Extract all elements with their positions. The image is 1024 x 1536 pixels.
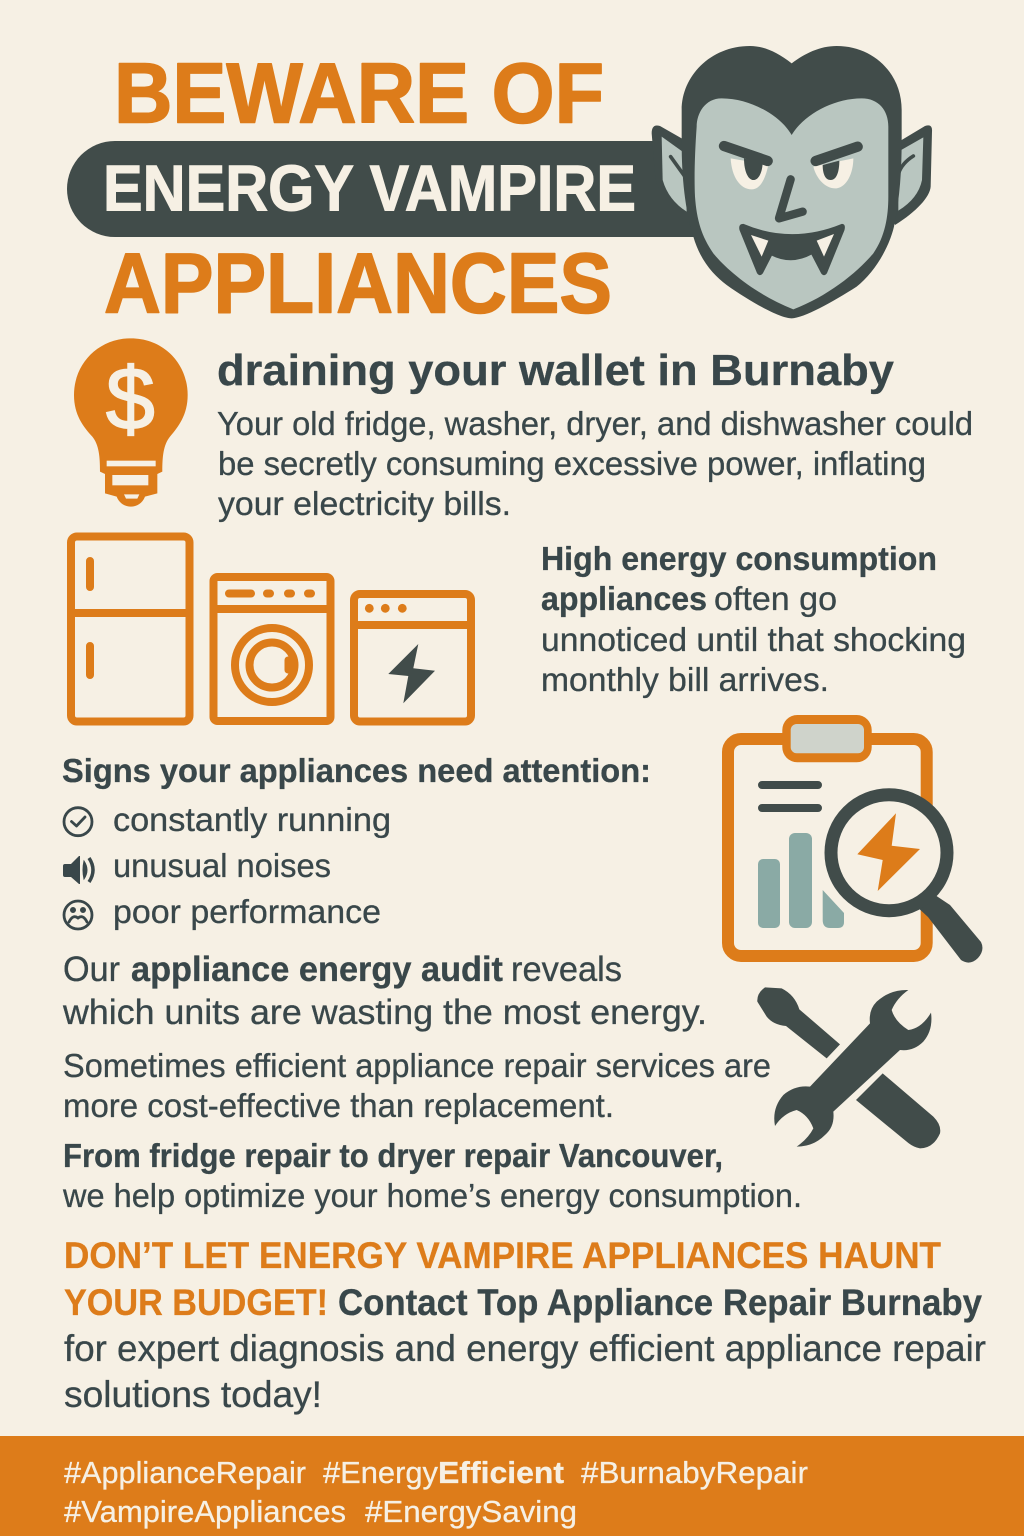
service text	[62, 1137, 802, 1214]
intro paragraph: Your old fridge, washer, dryer, and dishwasher could	[217, 405, 973, 442]
title line: appliances: APPLIANCES	[104, 236, 612, 332]
callout: high energy consumption: appliances	[541, 580, 707, 617]
footer band with hashtags: #BurnabyRepair	[581, 1455, 808, 1490]
call to action: YOUR BUDGET!	[64, 1282, 328, 1323]
repair text: more cost-effective than replacement.	[63, 1087, 614, 1124]
signs list	[63, 801, 391, 930]
callout: high energy consumption: High energy consumption	[541, 540, 937, 577]
subheading: draining your wallet in Burnaby	[217, 346, 895, 395]
icon: vampire face	[652, 46, 932, 318]
repair text: Sometimes efficient appliance repair services are	[63, 1047, 771, 1084]
audit text: Our	[63, 950, 120, 989]
service text: From fridge repair to dryer repair Vancouver,	[63, 1137, 723, 1174]
icon: crossed screwdriver and wrench	[757, 987, 940, 1148]
audit text: reveals	[511, 950, 622, 989]
call to action: for expert diagnosis and energy efficient appliance repair	[64, 1328, 986, 1369]
callout: high energy consumption: unnoticed until that shocking	[541, 621, 966, 658]
footer band with hashtags	[0, 1436, 1024, 1536]
icon: dishwasher with lightning bolt	[354, 594, 471, 722]
footer band with hashtags: #VampireAppliances	[64, 1494, 346, 1529]
icon: unhappy face	[64, 901, 92, 929]
callout: high energy consumption: often go	[714, 580, 837, 617]
dark pill banner	[67, 141, 720, 237]
callout: high energy consumption	[541, 540, 966, 698]
call to action: Contact Top Appliance Repair Burnaby	[338, 1282, 982, 1323]
call to action: solutions today!	[64, 1374, 322, 1415]
audit text: which units are wasting the most energy.	[62, 993, 707, 1032]
icon: washing machine	[214, 577, 330, 721]
footer band with hashtags: #Energy	[323, 1455, 438, 1490]
repair text	[63, 1047, 771, 1124]
footer band with hashtags: #ApplianceRepair	[64, 1455, 306, 1490]
icons: appliances row	[71, 536, 471, 722]
intro paragraph	[217, 405, 973, 522]
icon: clipboard audit with magnifier	[728, 715, 982, 963]
call to action: DON’T LET ENERGY VAMPIRE APPLIANCES HAUNT	[64, 1235, 941, 1276]
footer band with hashtags: #EnergySaving	[365, 1494, 577, 1529]
icon: fridge	[71, 536, 190, 722]
call to action	[64, 1235, 986, 1415]
intro paragraph: your electricity bills.	[218, 485, 511, 522]
service text: we help optimize your home’s energy consumption.	[62, 1177, 802, 1214]
intro paragraph: be secretly consuming excessive power, inflating	[218, 445, 926, 482]
list item: unusual noises: unusual noises	[113, 847, 331, 884]
list item: poor performance: poor performance	[113, 893, 381, 930]
list item: constantly running: constantly running	[113, 801, 391, 838]
title line: energy vampire: ENERGY VAMPIRE	[103, 152, 636, 224]
callout: high energy consumption: monthly bill arrives.	[541, 661, 829, 698]
title line: beware of: BEWARE OF	[114, 46, 604, 142]
audit text	[62, 950, 707, 1032]
icon: light bulb with dollar sign: $	[106, 349, 155, 448]
icon: check circle	[64, 808, 92, 836]
audit text: appliance energy audit	[131, 950, 503, 989]
footer band with hashtags: Efficient	[438, 1455, 564, 1490]
icon: speaker	[63, 856, 93, 884]
icon: light bulb with dollar sign	[74, 338, 188, 507]
title banner	[67, 46, 720, 332]
signs heading: Signs your appliances need attention:	[62, 752, 651, 789]
